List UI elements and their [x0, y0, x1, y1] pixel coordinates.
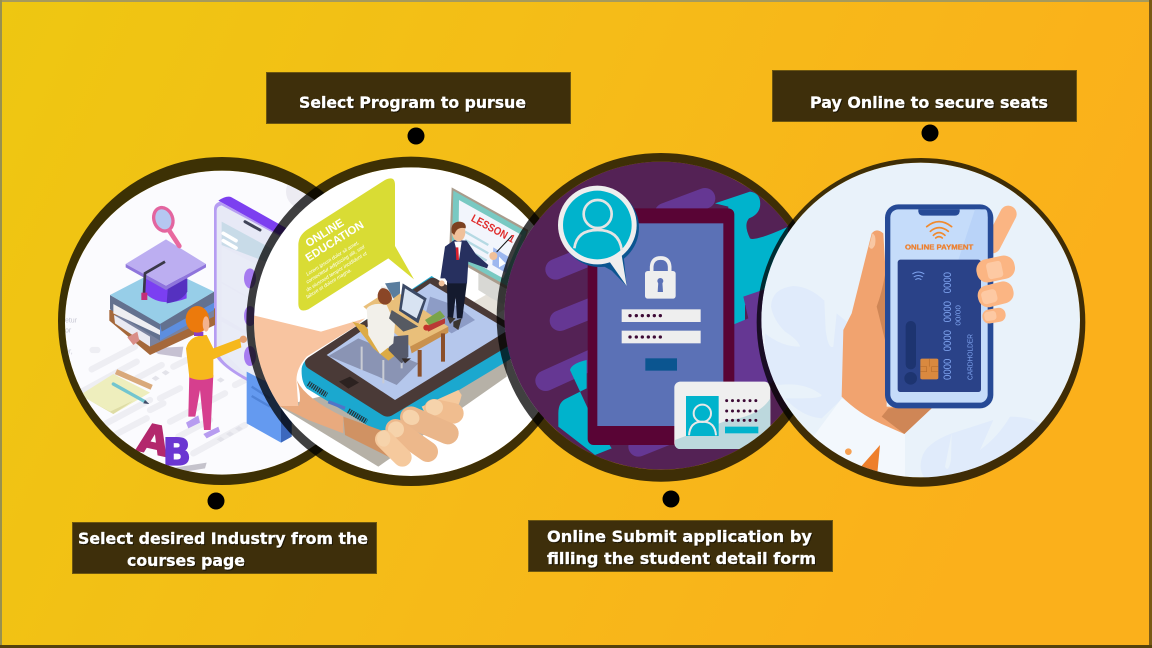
- icon: phone with card: ONLINE PAYMENT: [905, 243, 974, 252]
- icon: padlock: [645, 258, 676, 299]
- icon: hand holding phone: [252, 315, 462, 458]
- icon: id card: [674, 382, 770, 449]
- panel: step 1 circle, choose industry: [58, 157, 324, 485]
- icon: monitor: LESSON 1: [469, 213, 517, 246]
- payment card: CARDHOLDER: [965, 334, 974, 380]
- panel: step 2 circle, online education: [246, 156, 544, 486]
- icon: letters AB: A: [134, 415, 174, 466]
- icon: phone with card: [885, 204, 993, 408]
- icon: speech bubble: do eiusmod tempor incididunt ut: [305, 251, 369, 293]
- payment card: 00/00: [954, 305, 963, 326]
- icon: speech bubble: Lorem ipsum dolor sit amet,: [305, 240, 361, 278]
- panel: step 3 circle, application form: [496, 153, 796, 482]
- marker dot: step 2: [408, 128, 424, 144]
- icon: fingers: [976, 256, 1015, 324]
- label: step 4: Pay Online to secure seats: [810, 93, 1048, 112]
- label: step 3: Online Submit application by: [547, 527, 813, 546]
- icon: teacher figure: [439, 222, 512, 330]
- payment card: 0000: [942, 301, 954, 322]
- background leaves: [765, 286, 1042, 478]
- label: step 2: [266, 72, 570, 124]
- icon: blue box: [247, 372, 292, 443]
- label: step 1: [72, 522, 376, 574]
- icon: book stack: [109, 267, 215, 357]
- icon: smartphone: [302, 276, 522, 433]
- marker dot: step 4: [922, 124, 938, 142]
- floor shadow: [280, 350, 507, 467]
- purple and cyan blobs: [546, 198, 705, 447]
- icon: speech bubble: ONLINE: [304, 217, 347, 250]
- icon: desk and student: [352, 282, 448, 383]
- marker dot: step 1: [208, 492, 224, 510]
- panel: step 4 circle, online payment: [755, 150, 1095, 497]
- label: step 3: [528, 520, 832, 572]
- marker dot: step 3: [662, 490, 680, 508]
- panel: step 1 circle, choose industry: or: [65, 328, 72, 335]
- icon: hand: [842, 214, 1008, 434]
- panel: step 1 circle, choose industry: pr,: [65, 348, 73, 355]
- shirt cuff: [814, 398, 905, 477]
- label: step 2: Select Program to pursue: [299, 93, 526, 112]
- icon: speech bubble: labore et dolore magna.: [305, 267, 353, 300]
- login fields: [622, 309, 701, 371]
- icon: speech bubble: consectetur adipiscing elit, sed: [305, 244, 366, 285]
- icon: notepad and pencil: [80, 372, 152, 414]
- payment card: 0000: [942, 330, 954, 351]
- icon: speech bubble: [298, 178, 414, 310]
- icon: phone: [214, 197, 290, 387]
- icon: letters AB: B: [163, 430, 191, 474]
- icon: magnifier: [150, 205, 179, 246]
- payment card: 0000: [942, 272, 954, 293]
- icon: student figure: [186, 306, 247, 438]
- payment card: 0000: [942, 359, 954, 380]
- icon: wifi signal: [927, 222, 952, 238]
- label: step 4: [772, 70, 1076, 122]
- icon: phone with login form: [588, 208, 734, 445]
- icon: monitor: [449, 187, 528, 323]
- icon: speech bubble: EDUCATION: [304, 219, 366, 265]
- label: step 1: Select desired Industry from the: [78, 529, 368, 548]
- label: step 1: courses page: [127, 551, 245, 570]
- icon: user speech bubble: [558, 186, 639, 286]
- panel: step 1 circle, choose industry: etur: [65, 318, 78, 325]
- label: step 3: filling the student detail form: [547, 549, 816, 568]
- payment card: [898, 260, 981, 392]
- icon: graduation cap: [126, 239, 206, 303]
- icon: letters AB: [136, 423, 207, 471]
